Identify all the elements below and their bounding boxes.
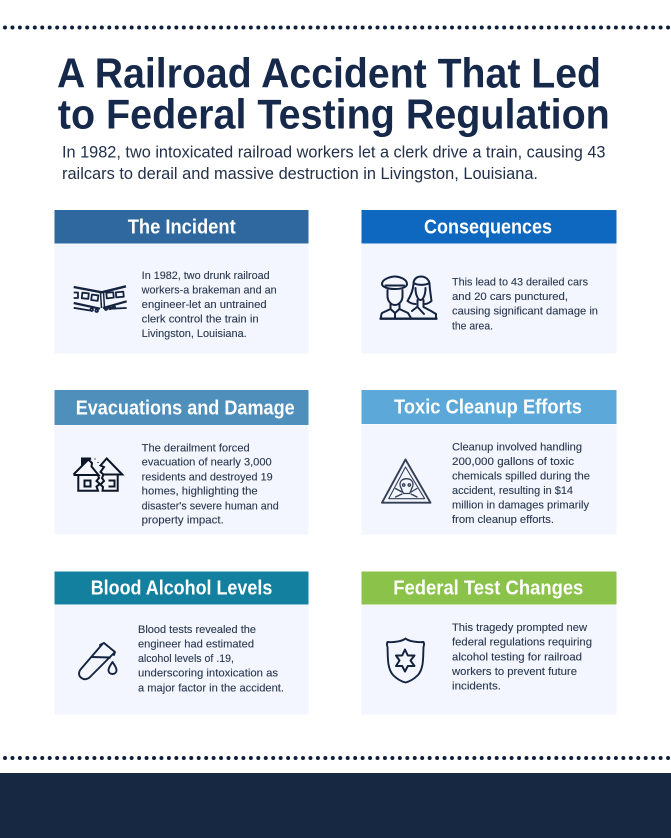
text: federal test changes: incidents. xyxy=(452,680,501,692)
text: consequences: This lead to 43 derailed cars xyxy=(452,277,588,289)
text: toxic cleanup efforts: from cleanup efforts. xyxy=(452,514,554,526)
text: consequences xyxy=(452,277,598,332)
text: consequences: the area. xyxy=(452,320,493,332)
icon: train crew xyxy=(380,276,436,319)
text: toxic cleanup efforts: chemicals spilled during the xyxy=(452,471,590,483)
text: toxic cleanup efforts: accident, resulting in $14 xyxy=(452,485,573,497)
panel: toxic cleanup efforts xyxy=(362,390,616,534)
text: consequences: causing significant damage in xyxy=(452,306,598,318)
heading: evacuations and damage: Evacuations and Damage xyxy=(76,397,295,419)
heading: toxic cleanup efforts: Toxic Cleanup Efforts xyxy=(394,396,582,418)
text: federal test changes: federal regulations requiring xyxy=(452,637,592,649)
text: evacuations and damage xyxy=(142,442,279,527)
panel: blood alcohol levels xyxy=(54,572,308,714)
icon: toxic warning triangle xyxy=(382,460,430,503)
text: consequences: and 20 cars punctured, xyxy=(452,291,568,303)
heading: the incident: The Incident xyxy=(128,216,236,238)
title: A Railroad Accident That Led xyxy=(57,49,601,96)
icon: police shield xyxy=(387,638,424,682)
text: the incident: In 1982, two drunk railroad xyxy=(142,270,270,282)
text: evacuations and damage: property impact. xyxy=(142,515,224,527)
text: federal test changes xyxy=(451,622,592,692)
text: evacuations and damage: disaster's severe human and xyxy=(142,500,279,512)
text: toxic cleanup efforts xyxy=(452,442,590,526)
text: the incident: engineer-let an untrained xyxy=(142,299,267,311)
text: blood alcohol levels xyxy=(138,624,284,694)
subtitle: railcars to derail and massive destruction in Livingston, Louisiana. xyxy=(62,164,538,183)
text: blood alcohol levels: underscoring intoxication as xyxy=(138,668,278,680)
icon: derailed train xyxy=(74,286,127,312)
title xyxy=(57,49,610,137)
text: the incident xyxy=(141,270,277,340)
icon: test tube with drop xyxy=(79,643,116,679)
text: federal test changes: workers to prevent future xyxy=(451,666,577,678)
text: federal test changes: This tragedy prompted new xyxy=(452,622,587,634)
panel: federal test changes xyxy=(362,572,616,714)
panel: evacuations and damage xyxy=(54,390,308,534)
heading: federal test changes: Federal Test Changes xyxy=(393,577,583,599)
subtitle xyxy=(62,142,606,183)
text: evacuations and damage: homes, highlighting the xyxy=(142,486,258,498)
text: the incident: clerk control the train in xyxy=(142,313,259,325)
text: blood alcohol levels: engineer had estimated xyxy=(138,638,254,650)
text: evacuations and damage: residents and destroyed 19 xyxy=(142,471,273,483)
heading: blood alcohol levels: Blood Alcohol Levels xyxy=(91,577,272,599)
heading: consequences: Consequences xyxy=(424,216,552,238)
panel: consequences xyxy=(362,210,616,354)
text: blood alcohol levels: a major factor in the accident. xyxy=(138,682,284,694)
footer band xyxy=(0,773,671,838)
text: blood alcohol levels: Blood tests revealed the xyxy=(138,624,256,636)
text: evacuations and damage: evacuation of nearly 3,000 xyxy=(142,457,272,469)
text: the incident: Livingston, Louisiana. xyxy=(142,328,247,340)
text: federal test changes: alcohol testing for railroad xyxy=(452,651,582,663)
icon: destroyed house xyxy=(74,458,122,491)
subtitle: In 1982, two intoxicated railroad workers let a clerk drive a train, causing 43 xyxy=(62,142,606,161)
text: blood alcohol levels: alcohol levels of .19, xyxy=(138,653,234,665)
text: toxic cleanup efforts: Cleanup involved handling xyxy=(452,442,582,454)
text: the incident: workers-a brakeman and an xyxy=(141,284,277,296)
panel: the incident xyxy=(54,210,308,354)
title: to Federal Testing Regulation xyxy=(58,90,610,137)
text: toxic cleanup efforts: 200,000 gallons of toxic xyxy=(452,456,575,468)
text: evacuations and damage: The derailment forced xyxy=(142,442,250,454)
text: toxic cleanup efforts: million in damages primarily xyxy=(452,500,590,512)
